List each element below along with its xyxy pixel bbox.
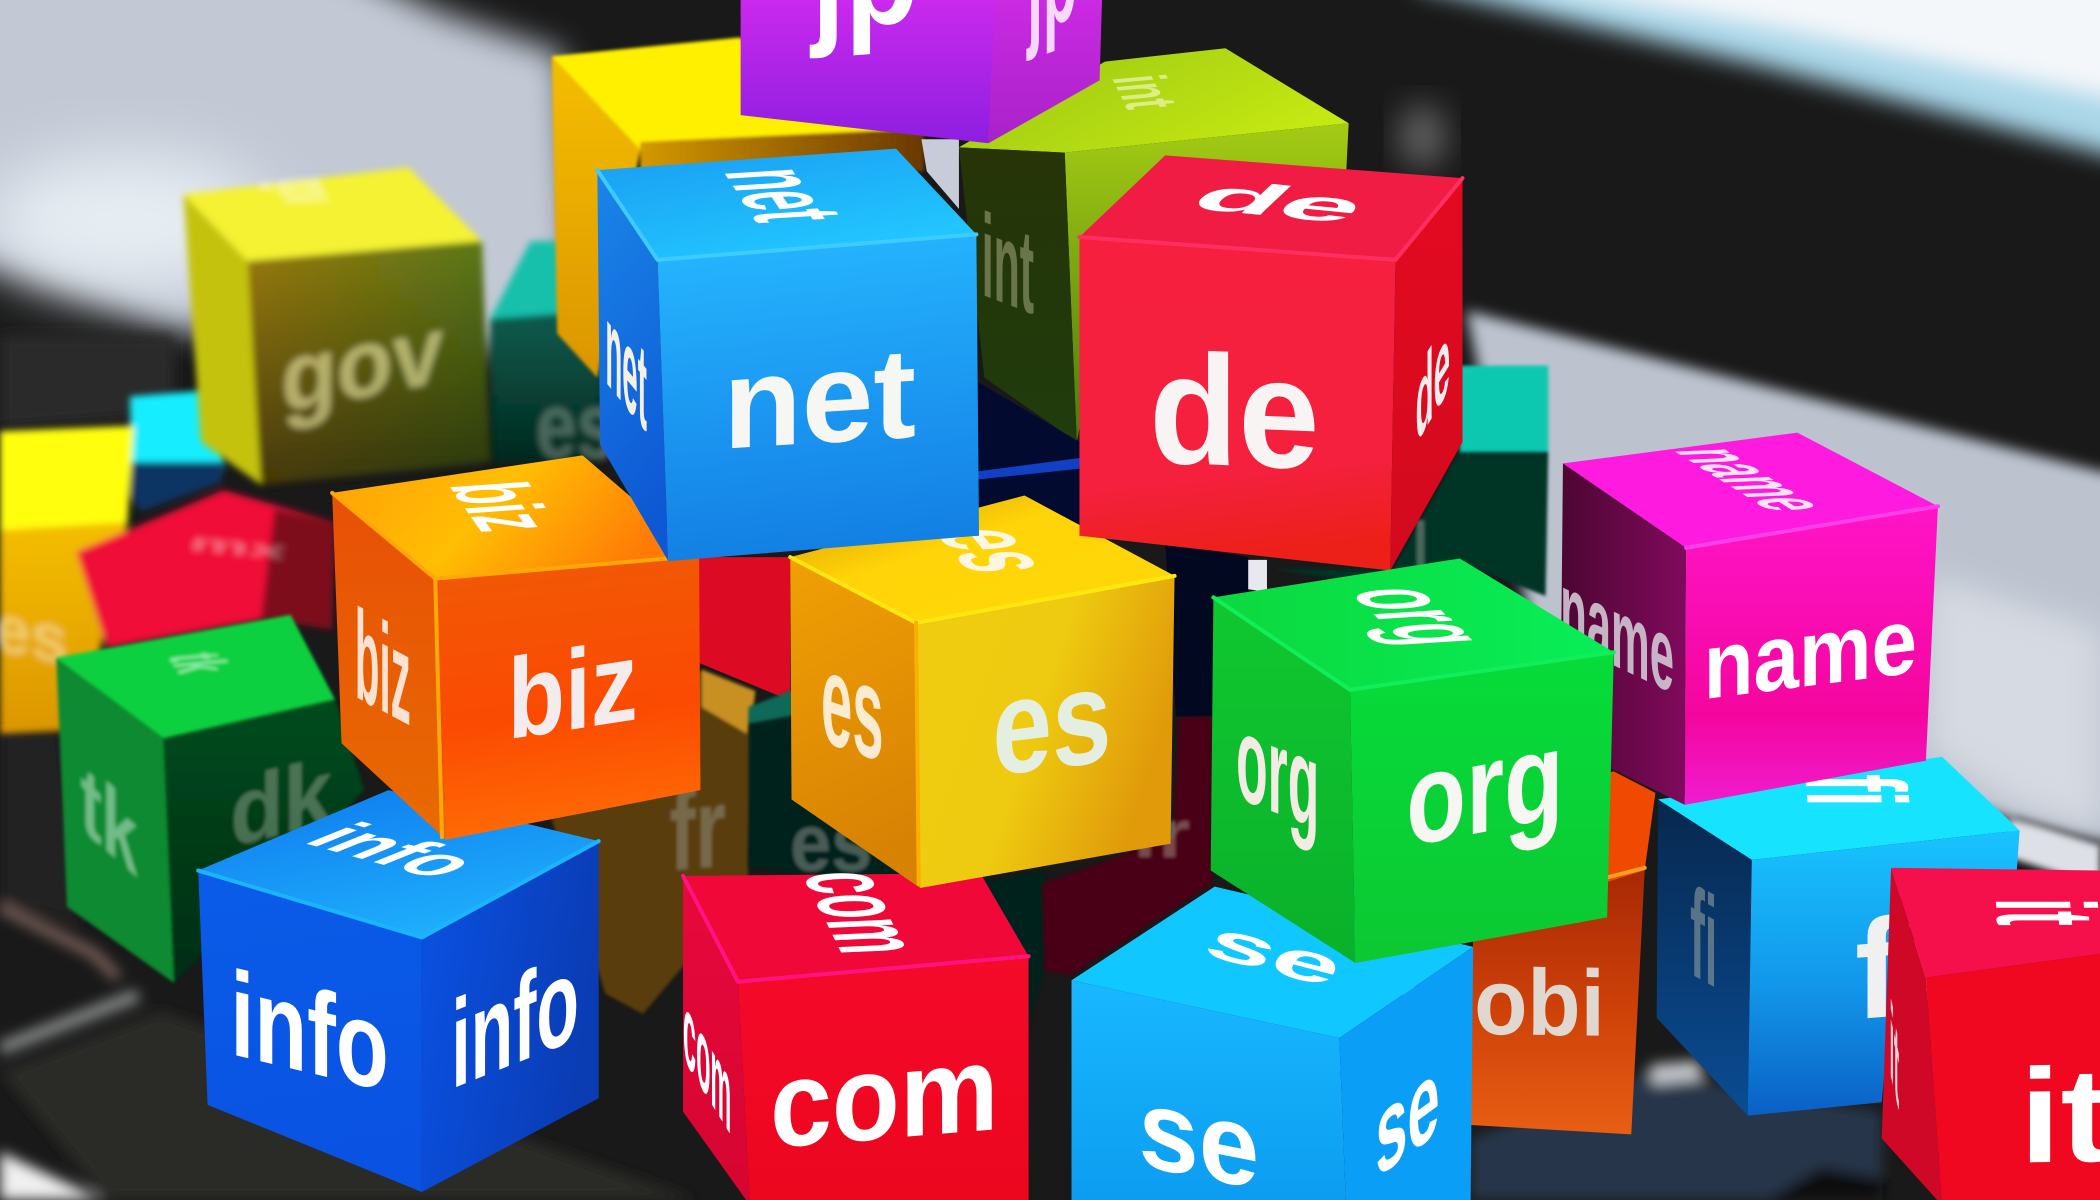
label: name side: name <box>1560 548 1674 715</box>
cube: gov <box>183 167 490 485</box>
label: se top: se <box>1193 910 1357 997</box>
cube: org <box>1211 558 1614 963</box>
label: se side: se <box>1375 1030 1439 1200</box>
cube: es <box>790 496 1175 888</box>
label: biz top: biz <box>425 478 578 535</box>
label: info side: info <box>230 946 389 1118</box>
label: fi top: fi <box>1775 774 1934 806</box>
cube: de <box>1079 155 1462 571</box>
cube: red back: mx <box>186 530 290 563</box>
cube: biz <box>332 455 700 840</box>
cube: dark pieces between main cubes <box>696 380 1267 717</box>
piece: dark navy under int <box>975 380 1079 536</box>
label: gov top: gov <box>257 175 357 206</box>
background: bright patch left <box>0 154 268 288</box>
piece: blue band <box>978 458 1079 479</box>
cube: teal back <box>490 241 618 478</box>
cube: yellow far left <box>0 426 134 734</box>
label: biz front: biz <box>508 617 638 764</box>
background: bright screen top right <box>1393 0 2100 174</box>
label: de front: de <box>1149 321 1319 503</box>
cube: dark red <box>1042 717 1212 975</box>
label: tk: tk <box>80 742 138 899</box>
cube: yellow top back <box>552 38 924 378</box>
label: biz side: biz <box>355 583 411 754</box>
cube: com <box>683 868 1029 1200</box>
cube: info <box>198 790 599 1192</box>
label: com side: com <box>683 966 731 1158</box>
background: pale laptop deck right <box>1467 311 2100 857</box>
label: es side: es <box>821 622 884 790</box>
label: net top: net <box>695 165 872 225</box>
cube: jp <box>741 0 1102 143</box>
label: fi front: fi <box>1855 887 1937 1050</box>
label: fr: fr <box>670 763 726 895</box>
cube: red back <box>76 490 335 648</box>
cube: mobi <box>1397 771 1655 1134</box>
label: int top: int <box>1096 72 1195 112</box>
cube: cyan back <box>130 390 225 512</box>
label: int: int <box>982 188 1034 339</box>
cube: teal back right <box>1272 366 1548 596</box>
label: de top: de <box>1176 171 1385 232</box>
label: tk top: tk <box>151 650 246 676</box>
label: info front: info <box>451 927 579 1115</box>
label: es top: es <box>906 526 1088 575</box>
label: gov: gov <box>281 295 444 434</box>
label: com front: com <box>770 1018 999 1174</box>
cube: name <box>1560 433 1938 805</box>
label: es front: es <box>992 639 1112 804</box>
cube: net <box>597 149 979 561</box>
cube: fr brown <box>552 670 755 1014</box>
label: name top: name <box>1652 446 1855 512</box>
label: dark red dim text: fr <box>1132 796 1190 872</box>
piece: red behind biz <box>696 557 790 700</box>
background: keyboard bottom right <box>1471 1061 1882 1200</box>
label: mobi: mobi <box>1397 949 1605 1057</box>
cube: teal back right: l <box>1413 508 1428 584</box>
label: info top: info <box>285 814 506 886</box>
label: it side: it <box>1890 974 1899 1134</box>
label: net side: net <box>605 275 647 459</box>
cube: se <box>1071 887 1473 1200</box>
label: es dark: es <box>790 799 872 888</box>
label: de side: de <box>1416 297 1450 467</box>
background: soft gradient lighter deck <box>1929 576 2100 830</box>
background: glow on dark bezel <box>1398 104 1446 169</box>
label: net front: net <box>723 322 916 477</box>
cube: fi <box>1657 757 2020 1116</box>
label: dl: dk <box>230 739 333 867</box>
label: org front: org <box>1406 703 1564 874</box>
background: pale screen top left <box>0 0 576 351</box>
cube: dark green behind es <box>749 690 1045 1045</box>
piece: navy column <box>1165 542 1248 717</box>
label: org top: org <box>1321 583 1523 648</box>
piece: white gap <box>1248 560 1267 592</box>
cube: blurred back cubes left <box>0 241 618 734</box>
background: thin key edge <box>2009 818 2100 887</box>
cube: green int <box>959 48 1349 442</box>
cube: green back left tk <box>56 615 364 983</box>
label: fi side: fi <box>1690 858 1717 1016</box>
cube: teal back: es <box>536 374 618 478</box>
cube: it <box>1882 868 2100 1200</box>
label: org side: org <box>1236 686 1319 857</box>
background sliver: gap between net and int cubes <box>921 139 959 209</box>
background: keyboard bottom left <box>0 335 696 1200</box>
label: com top: com <box>776 868 951 956</box>
label: name front: name <box>1704 587 1917 719</box>
